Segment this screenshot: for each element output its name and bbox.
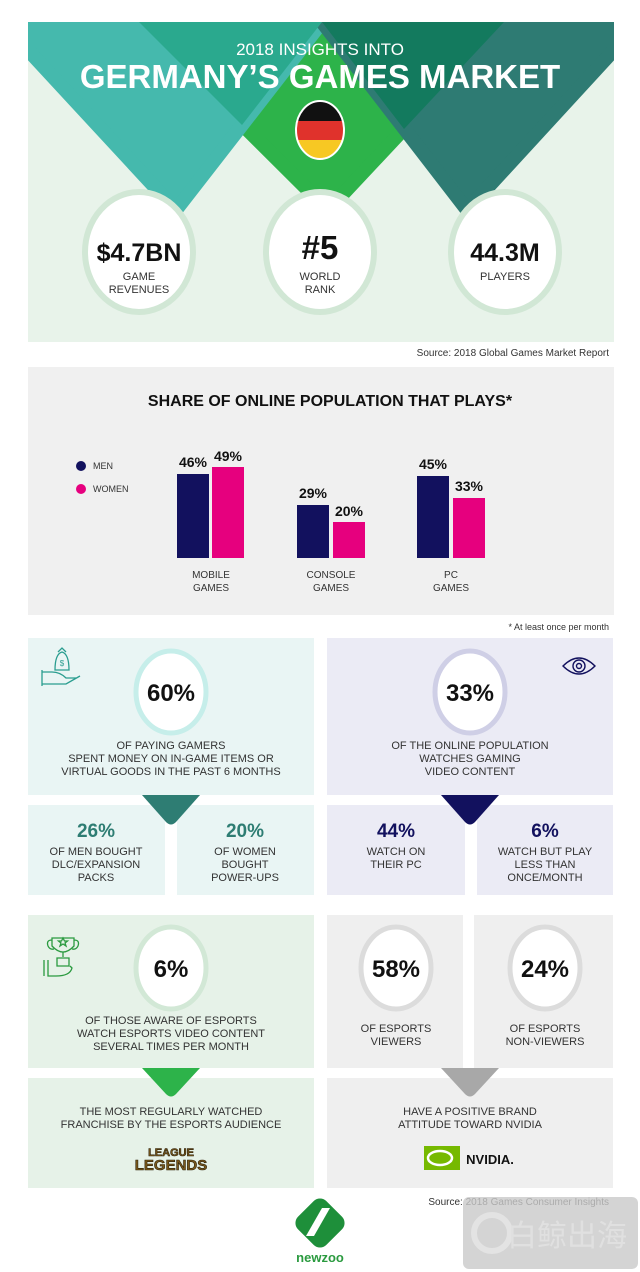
source 2: Source: 2018 Games Consumer Insights: [428, 1197, 609, 1208]
panel: nvidia: HAVE A POSITIVE BRAND: [403, 1106, 537, 1118]
box: esports viewers: OF ESPORTS: [361, 1023, 431, 1035]
bar chart: 33%: [455, 478, 484, 494]
panel: nvidia: ATTITUDE TOWARD NVIDIA: [398, 1119, 543, 1131]
bar chart: 45%: [419, 456, 448, 472]
logo: nvidia: [424, 1146, 514, 1170]
box: men DLC: [28, 805, 165, 895]
legend: [76, 461, 128, 494]
box: esports non-viewers: NON-VIEWERS: [506, 1036, 584, 1048]
stat: world rank: [266, 192, 374, 312]
box: women power-ups: 20%: [226, 821, 264, 842]
arrow: navy: [441, 795, 499, 824]
legend: WOMEN: [93, 484, 128, 494]
icon: trophy hand: [44, 938, 78, 976]
box: women power-ups: POWER-UPS: [211, 872, 279, 884]
text: esports aware: WATCH ESPORTS VIDEO CONTENT: [77, 1028, 265, 1040]
bar chart: 20%: [335, 503, 364, 519]
panel: share of online population: [28, 367, 614, 615]
text: esports aware: SEVERAL TIMES PER MONTH: [93, 1041, 249, 1053]
watermark: [463, 1197, 638, 1269]
box: women power-ups: BOUGHT: [221, 859, 269, 871]
box: watch on pc: [327, 805, 465, 895]
category labels: GAMES: [433, 583, 469, 594]
stat circle 33%: 33%: [446, 680, 494, 707]
stat circle 33%: [435, 651, 505, 733]
watermark: 白鲸出海: [507, 1220, 627, 1253]
logo: league of legends: LEAGUE: [148, 1147, 194, 1159]
category labels: MOBILE: [192, 570, 230, 581]
box: watch on pc: THEIR PC: [370, 859, 422, 871]
stat: world rank: RANK: [305, 284, 336, 296]
box: esports non-viewers: OF ESPORTS: [510, 1023, 580, 1035]
panel: league of legends: [28, 1078, 314, 1188]
panel: league of legends: THE MOST REGULARLY WATCHED: [80, 1106, 262, 1118]
arrow: green: [142, 1068, 200, 1096]
source 1: Source: 2018 Global Games Market Report: [417, 348, 609, 359]
bar chart: 49%: [214, 448, 243, 464]
panel: header: [20, 14, 622, 342]
bar chart: 29%: [299, 485, 328, 501]
stat: revenues: $4.7BN: [97, 239, 181, 267]
logo: league of legends: LEGENDS: [135, 1157, 207, 1174]
box: watch on pc: WATCH ON: [367, 846, 425, 858]
title: 2018 INSIGHTS INTO: [236, 40, 404, 59]
arrow: teal: [142, 795, 200, 824]
chart title: SHARE OF ONLINE POPULATION THAT PLAYS*: [148, 393, 513, 410]
logo: nvidia: NVIDIA.: [466, 1152, 514, 1167]
text: esports aware: OF THOSE AWARE OF ESPORTS: [85, 1015, 257, 1027]
header chevrons: [20, 14, 622, 214]
bar chart: 46%: [179, 454, 208, 470]
title: [80, 40, 560, 95]
box: esports non-viewers: 24%: [521, 956, 569, 983]
category labels: CONSOLE: [307, 570, 356, 581]
text: paying gamers: OF PAYING GAMERS: [116, 740, 226, 752]
box: watch but play less: [477, 805, 613, 895]
stat: world rank: WORLD: [300, 271, 341, 283]
stat circle 60%: [136, 651, 206, 733]
category labels: PC: [444, 570, 458, 581]
icon: money bag hand: [42, 648, 80, 686]
box: watch but play less: LESS THAN: [515, 859, 576, 871]
box: esports viewers: VIEWERS: [371, 1036, 421, 1048]
stat: revenues: REVENUES: [109, 284, 169, 296]
stat: players: [451, 192, 559, 312]
icon: eye: [563, 658, 595, 674]
box: men DLC: OF MEN BOUGHT: [50, 846, 143, 858]
box: watch but play less: 6%: [531, 821, 559, 842]
category labels: GAMES: [313, 583, 349, 594]
text: online population watches: [391, 740, 549, 778]
stat circle 6%: 6%: [154, 956, 188, 983]
stat: world rank: #5: [302, 229, 338, 266]
category labels: [192, 570, 469, 594]
panel: league of legends: FRANCHISE BY THE ESPORTS AUDIENCE: [61, 1119, 281, 1131]
stat: players: 44.3M: [470, 239, 540, 267]
icon: german flag: [295, 100, 345, 160]
box: men DLC: 26%: [77, 821, 115, 842]
box: esports non-viewers: [474, 915, 613, 1068]
box: watch on pc: 44%: [377, 821, 415, 842]
text: online population watches: OF THE ONLINE POPULATION: [391, 740, 549, 752]
stat: revenues: [85, 192, 193, 312]
title: GERMANY’S GAMES MARKET: [80, 58, 560, 95]
box: men DLC: PACKS: [78, 872, 114, 884]
panel: esports awareness: [28, 915, 314, 1068]
legend: MEN: [93, 461, 113, 471]
text: online population watches: VIDEO CONTENT: [425, 766, 516, 778]
icon: money bag hand: $: [60, 659, 65, 668]
arrow: grey: [441, 1068, 499, 1096]
logo: newzoo: [292, 1195, 348, 1265]
box: women power-ups: [177, 805, 314, 895]
box: women power-ups: OF WOMEN: [214, 846, 276, 858]
text: paying gamers: [61, 740, 281, 778]
text: paying gamers: VIRTUAL GOODS IN THE PAST 6 MONTHS: [61, 766, 281, 778]
stat circle 60%: 60%: [147, 680, 195, 707]
panel: spending: [28, 638, 314, 795]
bar chart: [177, 448, 485, 558]
text: paying gamers: SPENT MONEY ON IN-GAME ITEMS OR: [68, 753, 274, 765]
panel: video watching: [327, 638, 613, 795]
stat: revenues: GAME: [123, 271, 155, 283]
footnote: * At least once per month: [508, 622, 609, 632]
category labels: GAMES: [193, 583, 229, 594]
logo: newzoo: newzoo: [296, 1250, 344, 1265]
text: online population watches: WATCHES GAMING: [419, 753, 521, 765]
box: esports viewers: 58%: [372, 956, 420, 983]
box: watch but play less: WATCH BUT PLAY: [498, 846, 593, 858]
stat circle 6%: [136, 927, 206, 1009]
panel: nvidia: [327, 1078, 613, 1188]
text: esports aware: [77, 1015, 265, 1053]
box: men DLC: DLC/EXPANSION: [52, 859, 140, 871]
box: watch but play less: ONCE/MONTH: [507, 872, 583, 884]
box: esports viewers: [327, 915, 463, 1068]
stat: players: PLAYERS: [480, 271, 530, 283]
logo: league of legends: [135, 1147, 207, 1174]
